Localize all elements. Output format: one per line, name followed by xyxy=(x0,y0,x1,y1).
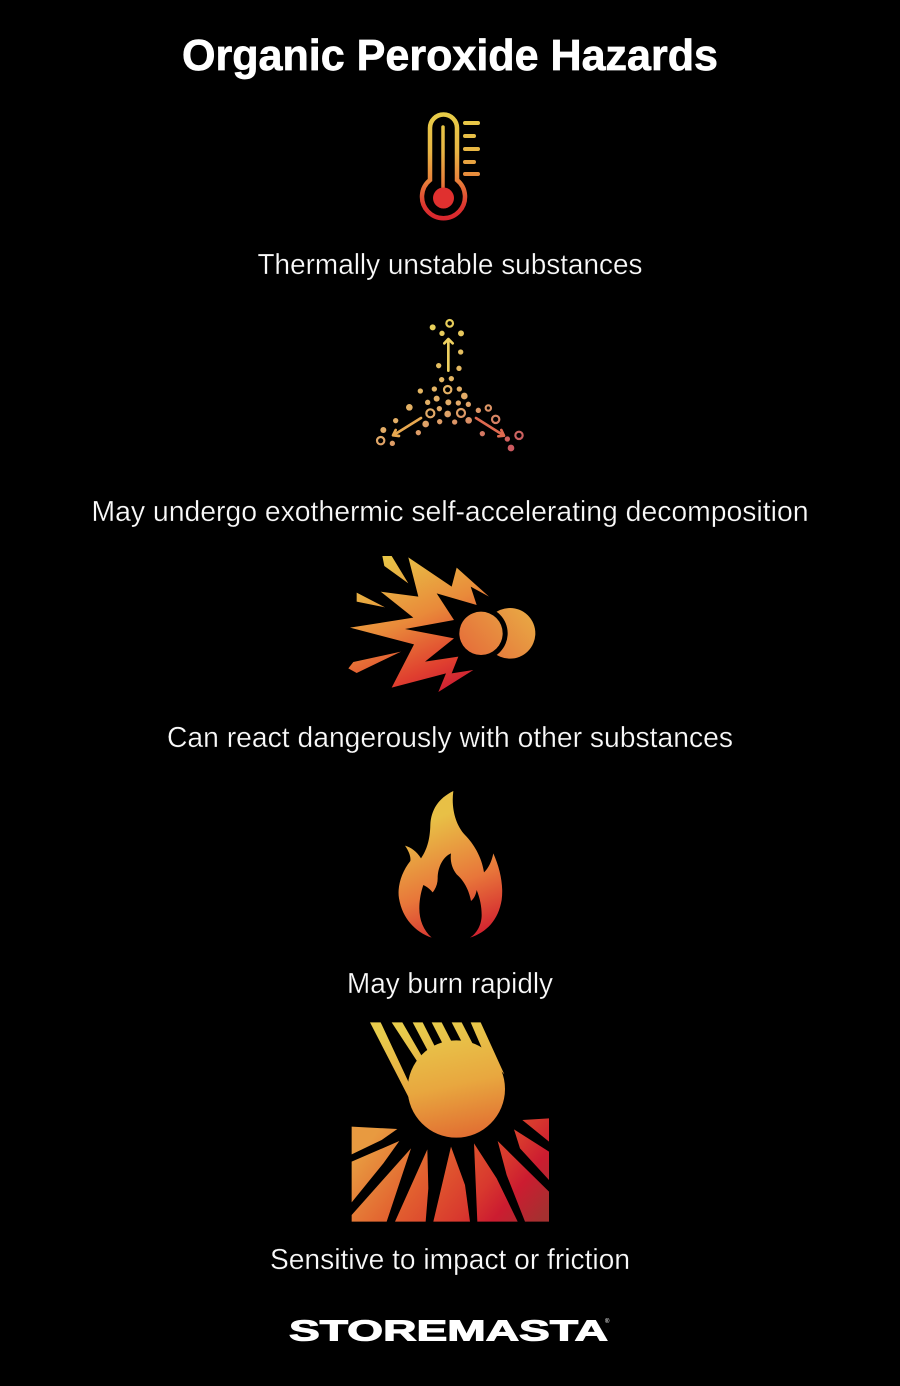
icon: decomposition particles xyxy=(377,320,523,451)
icon: flame xyxy=(399,791,502,938)
logo: StoreMasta xyxy=(289,1316,610,1348)
logo: StoreMasta: STOREMASTA xyxy=(289,1316,608,1348)
ground rays xyxy=(352,1118,549,1222)
logo: StoreMasta: ® xyxy=(605,1318,610,1325)
caption: thermally unstable: Thermally unstable substances xyxy=(258,249,642,281)
caption: decomposition: May undergo exothermic self-accelerating decomposition xyxy=(92,496,808,528)
falling object with trails xyxy=(370,1022,505,1138)
caption: reacts dangerously: Can react dangerously with other substances xyxy=(167,722,733,754)
icon: impact xyxy=(352,1022,549,1222)
caption: impact or friction: Sensitive to impact or friction xyxy=(270,1244,630,1276)
title: Organic Peroxide Hazards xyxy=(182,31,718,80)
caption: burns rapidly: May burn rapidly xyxy=(347,968,553,1000)
icon: reaction explosion xyxy=(348,556,535,692)
icon: thermometer xyxy=(422,114,478,218)
